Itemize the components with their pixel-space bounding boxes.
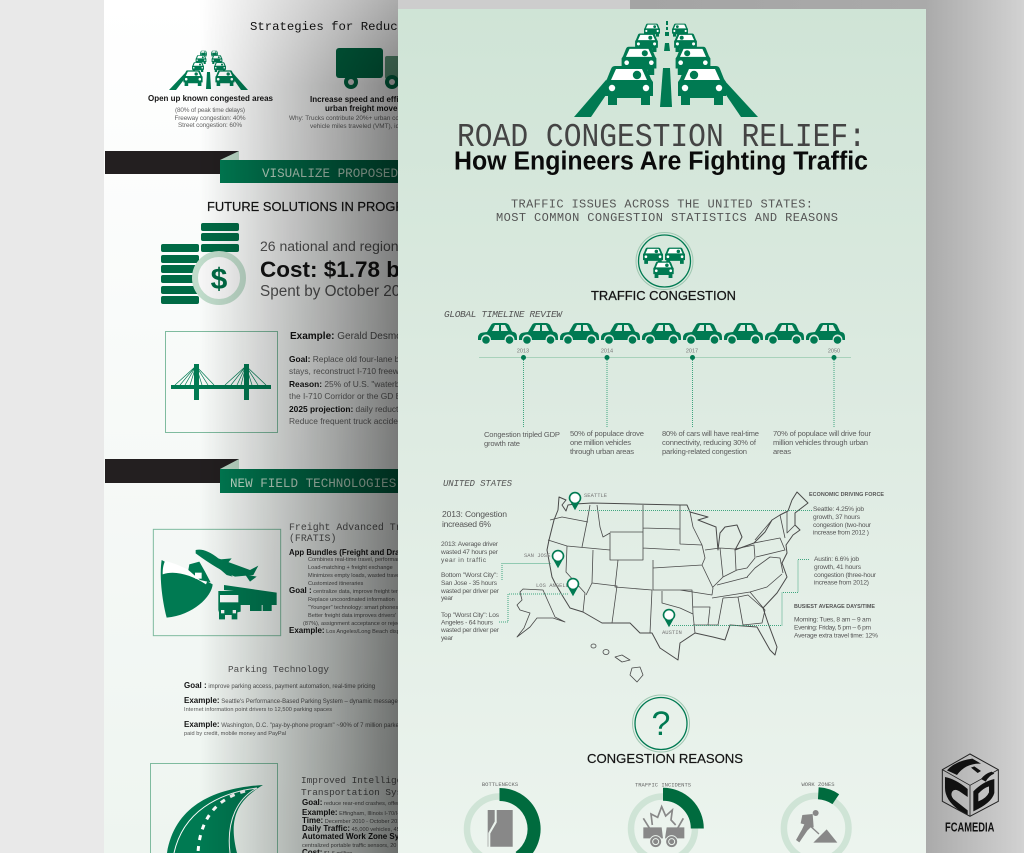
icon: los angeles pin: LOS ANGELES [536,582,573,589]
panel: road congestion relief front sheet [398,9,926,853]
icon: seattle pin: SEATTLE [584,492,608,499]
text: bottom worst city: San Jose - 35 hours [441,580,498,587]
text: parking technology: paid by credit, mobile money and PayPal [184,731,286,737]
icon: coins and dollar: $ [211,263,228,296]
icon: coins and dollar [161,223,243,304]
chart: traffic incidents donut: TRAFFIC INCIDENTS [635,782,692,788]
text: timeline 2017: 80% of cars will have real-time [662,429,759,438]
text: increase speed: Increase speed and efficiency in [310,95,433,104]
text: economic driving force: congestion (two-hour [813,522,872,529]
heading: strategies: Strategies for Reducing Congestion [250,20,501,34]
chart: bottlenecks donut [467,781,534,853]
text: improved transportation: Example: Effingham, Illinois I-70/I-57 [302,808,405,817]
text: timeline 2014: through urban areas [570,447,634,456]
text: economic driving force: congestion (three-hour [814,572,877,579]
chart: bottlenecks donut: BOTTLENECKS [482,781,519,788]
text: bottom worst city: year [441,595,454,602]
text: timeline 2013: Congestion tripled GDP [484,430,560,439]
panel: strategies back sheet [104,0,630,853]
title: How Engineers Are Fighting Traffic [454,148,868,176]
text: freight advanced: Replace uncoordinated information [308,597,395,603]
icon: three cars in circle [636,232,693,290]
icon: san jose pin [524,550,564,568]
text: freight advanced: Better freight data improves drivers' [308,613,396,619]
text: project cost: Cost: $1.78 billion [260,257,453,282]
text: improved transportation [301,775,420,853]
text: increase speed [289,95,433,130]
icon row: nine cars [478,323,845,344]
heading: united states: UNITED STATES [443,479,513,489]
text: parking technology: Example: Seattle's Performance-Based Parking System – dynamic messages + [184,696,406,705]
text: freight advanced: Combines real-time travel, performance [308,557,406,563]
text: bridge example: the I-710 Corridor or the GD Bridge [289,391,420,401]
text: bottom worst city: wasted per driver per [440,588,500,595]
banner: visualize proposed [105,151,474,183]
text: economic driving force: growth, 37 hours [813,514,861,521]
chart: timeline [479,348,851,428]
logo: fcamedia [942,754,998,834]
text: improved transportation: Goal: reduce rear-end crashes, offer [302,798,399,807]
heading: congestion reasons: CONGESTION REASONS [587,751,743,766]
text: improved transportation: Time: December 2010 - October 2011 [302,816,403,825]
icon: seattle pin [569,492,608,510]
text: congestion increased [442,509,507,529]
callout: dotted leaders [499,510,812,626]
subtitle: TRAFFIC ISSUES ACROSS THE UNITED STATES: [511,198,813,212]
text: bottom worst city: Bottom "Worst City": [441,572,498,579]
banner: visualize proposed: VISUALIZE PROPOSED SOLUTIONS [262,167,474,181]
text: bridge example: Example: Gerald Desmond Bridge [290,331,445,342]
subtitle [496,198,838,225]
text: economic driving force: increase from 2012) [814,580,869,586]
text: average driver: year in traffic [441,557,487,564]
chart: work zones donut [784,781,848,853]
text: improved transportation: Automated Work Zone System [302,832,418,841]
chart: work zones donut: WORK ZONES [801,781,835,788]
text: project cost: 26 national and regional projects [260,238,462,254]
text: bridge example: stays, reconstruct I-710 freeway [289,366,409,376]
text: economic driving force: Seattle: 4.25% job [813,506,864,513]
text: top worst city: Top "Worst City": Los [441,612,500,619]
logo: fcamedia: FCAMEDIA [945,819,995,834]
title: ROAD CONGESTION RELIEF: [457,119,866,156]
text: open up known congested areas: Open up known congested areas [148,94,274,103]
text: bridge example: Reduce frequent truck accidents [289,416,409,426]
text: parking technology: Goal : improve parking access, payment automation, real-time pricing [184,681,375,690]
text: freight advanced: Example: Los Angeles/Long Beach dispatch [289,626,410,635]
text: freight advanced: Customized itineraries [308,581,364,587]
text: timeline 2050: million vehicles through urban [773,438,868,447]
banner: new field technologies: NEW FIELD TECHNOLOGIES [230,477,396,491]
text: timeline 2050: areas [773,447,791,456]
text: parking technology [184,681,406,737]
title [454,119,868,176]
text: economic driving force: increase from 2012 ) [813,530,869,536]
text: timeline 2014: one million vehicles [570,438,631,447]
text: bridge example: Goal: Replace old four-lane bridge with six-lane cable- [289,354,492,364]
text: congestion increased: 2013: Congestion [442,509,507,519]
text: improved transportation: Transportation System [301,787,420,798]
text: busiest average days: Morning: Tues, 8 am – 9 am [794,616,872,624]
text: busiest average days: BUSIEST AVERAGE DAYS/TIME [794,604,875,610]
text: timeline 2017: parking-related congestion [662,447,747,456]
heading: traffic congestion: TRAFFIC CONGESTION [591,288,736,303]
text: busiest average days: Average extra travel time: 12% [794,632,878,640]
text: increase speed: vehicle miles traveled (VMT), idling [310,123,410,130]
panel: bridge icon box [166,332,278,432]
text: parking technology: Example: Washington, D.C. "pay-by-phone program" ~90% of 7 million parkers [184,720,404,729]
text: timeline 2014: 50% of populace drove [570,429,644,438]
icon: austin pin: AUSTIN [662,629,682,636]
banner: new field technologies [105,459,410,493]
text: freight advanced: Minimizes empty loads, wasted travel [308,573,401,579]
text: bridge example: Reason: 25% of U.S. "waterborne" cargo moves through [289,379,501,389]
text: economic driving force: ECONOMIC DRIVING FORCE [809,492,884,498]
text: timeline 2050: 70% of populace will drive four [773,429,871,438]
text: increase speed: urban freight movement [325,104,417,113]
text: timeline 2013: growth rate [484,439,520,448]
text: economic driving force: Austin: 6.6% job [814,556,859,563]
text: open up known congested areas [148,94,274,129]
text: project cost [260,238,462,300]
text: top worst city: wasted per driver per [440,627,500,634]
text: improved transportation: centralized portable traffic sensors, 20 [302,843,396,849]
icon: congested road small [169,51,248,90]
chart: timeline: 2014 [601,348,613,354]
heading: parking technology: Parking Technology [228,664,329,675]
panel: freight icon box [153,529,281,636]
text: improved transportation: Improved Intelligent [301,775,414,786]
icon: san jose pin: SAN JOSE [524,552,551,559]
text: freight advanced: Goal : centralize data, improve freight terminal [289,586,411,595]
text: top worst city: Angeles - 64 hours [441,620,494,626]
chart: timeline: 2050 [828,348,840,354]
text: increase speed: Why: Trucks contribute 20%+ urban congestion, [289,115,425,122]
text: timeline 2013 [484,430,560,448]
icon: question mark circle: ? [652,705,670,743]
chart: timeline: 2017 [686,348,698,354]
chart: united states map [517,492,808,682]
text: freight advanced: (87%), assignment acceptance or rejection [303,621,409,627]
text: busiest average days [794,604,878,640]
text: top worst city: year [441,635,454,642]
text: busiest average days: Evening: Friday, 5 pm – 6 pm [794,624,872,632]
text: average driver [440,541,499,564]
heading: global timeline review: GLOBAL TIMELINE REVIEW [444,309,563,320]
text: bridge example [289,331,501,426]
text: timeline 2050 [773,429,871,456]
text: top worst city [440,612,500,642]
text: average driver: 2013: Average driver [441,541,499,548]
text: economic driving force: growth, 41 hours [814,564,862,571]
text: freight advanced: "Younger" technology: smart phones [308,605,398,611]
text: timeline 2017 [662,429,759,456]
heading: future solutions: FUTURE SOLUTIONS IN PROGRESS [207,199,430,214]
icon: congested road hero [574,21,758,117]
subtitle: MOST COMMON CONGESTION STATISTICS AND REASONS [496,211,838,225]
text: economic driving force [809,492,884,586]
text: freight advanced: Freight Advanced Traveler Information [289,522,508,533]
text: congestion increased: increased 6% [442,519,491,529]
icon: austin pin [662,609,682,636]
text: open up known congested areas: (80% of peak time delays) [175,107,245,114]
text: bridge example: 2025 projection: daily reduction [289,404,410,414]
text: freight advanced: Load-matching + freight exchange [308,565,393,571]
text: freight advanced: (FRATIS) [289,533,336,544]
chart: timeline: 2013 [517,348,529,354]
chart: traffic incidents donut [631,782,697,853]
icon: freight truck [336,48,407,89]
text: bottom worst city [440,572,500,602]
text: improved transportation: Daily Traffic: 45,000 vehicles, 45% [302,824,405,833]
text: freight advanced [289,522,508,635]
text: freight advanced: App Bundles (Freight and Drayage) [289,548,420,557]
text: timeline 2017: connectivity, reducing 30% of [662,438,757,447]
text: project cost: Spent by October 2015 [260,283,417,300]
icon: los angeles pin [536,578,579,596]
text: parking technology: Internet information point drivers to 12,500 parking spaces [184,707,332,713]
text: average driver: wasted 47 hours per [440,549,499,556]
panel: road icon box [150,764,278,853]
icon: question mark circle [632,695,690,752]
text: timeline 2014 [570,429,644,456]
text: open up known congested areas: Freeway congestion: 40% [174,115,246,122]
text: open up known congested areas: Street congestion: 60% [178,122,242,129]
